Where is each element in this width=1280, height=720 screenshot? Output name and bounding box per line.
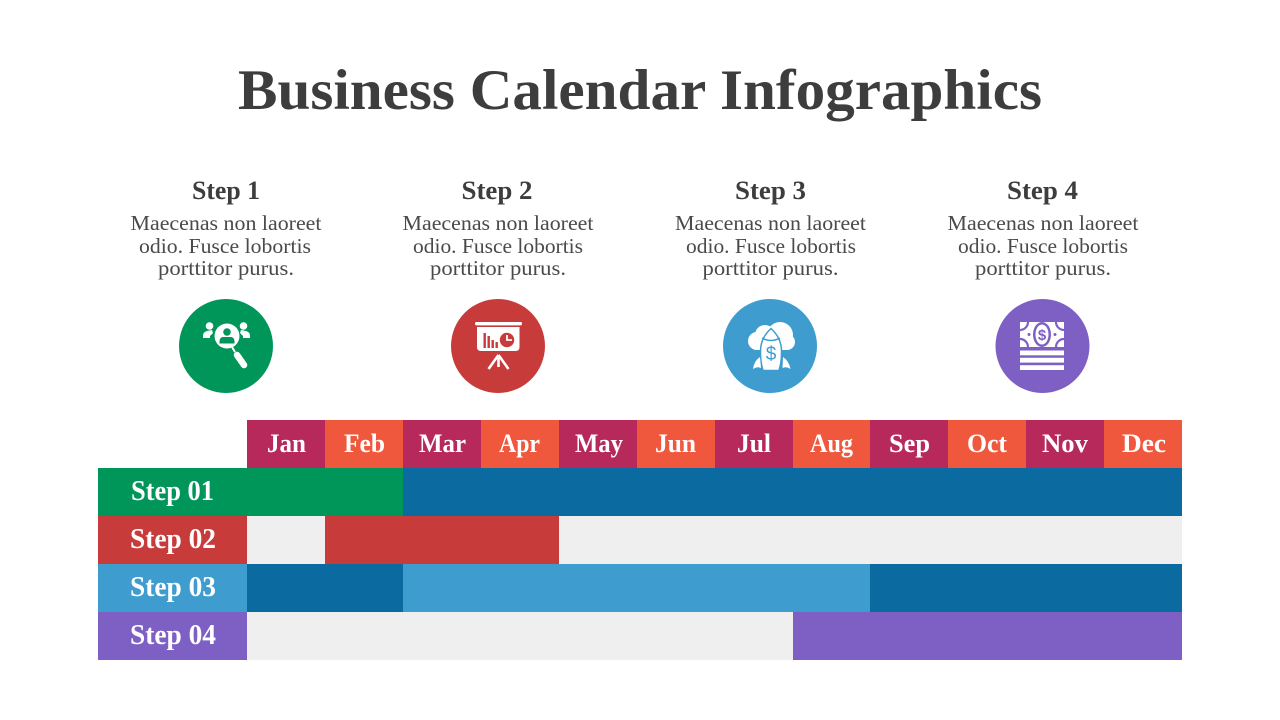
icon: banknotes [996,299,1090,393]
step 2 text: odio. Fusce lobortis [413,234,583,258]
icon: rocket and cloud [723,299,817,393]
month header row: Jul [737,429,771,458]
row: step 04: Step 04 [130,620,216,651]
month header row: Aug [810,429,853,458]
month header row: Mar [419,429,466,458]
month header row: Feb [344,429,385,458]
panel: step 2 [402,176,594,393]
step 1 text: odio. Fusce lobortis [139,234,311,258]
month header row: Oct [967,429,1007,458]
row: step 01: Step 01 [131,476,214,507]
row: step 03 [98,564,1182,612]
step 1 text [130,211,322,280]
icon: person search [179,299,273,393]
icon: banknotes: $ [1038,327,1047,344]
step 4 text: porttitor purus. [975,256,1111,280]
row: step 02 [98,516,1182,564]
panel: step 4 [948,176,1139,393]
step 1 text: porttitor purus. [158,256,294,280]
step 2 heading: Step 2 [462,176,532,205]
row: step 01 [98,468,1182,516]
step 4 text: odio. Fusce lobortis [958,234,1128,258]
step 4 heading: Step 4 [1007,176,1078,205]
step 4 text [948,211,1139,280]
step 2 text: porttitor purus. [430,256,566,280]
panel: step 1 [130,176,322,393]
row: step 02: Step 02 [130,524,216,555]
step 3 text: Maecenas non laoreet [675,211,866,235]
step 1 heading: Step 1 [192,176,260,205]
title: Business Calendar Infographics [238,59,1042,122]
icon: rocket and cloud: $ [766,344,777,365]
step 1 text: Maecenas non laoreet [130,211,322,235]
gantt chart [98,420,1182,660]
month header row: May [575,429,623,458]
step 3 heading: Step 3 [735,176,806,205]
icon: presentation board [451,299,545,393]
month header row: Apr [499,429,540,458]
month header row: Jun [655,429,697,458]
month header row: Sep [889,429,930,458]
step 4 text: Maecenas non laoreet [948,211,1139,235]
month header row: Nov [1042,429,1088,458]
row: step 04 [98,612,1182,660]
month header row [247,420,1182,468]
step 3 text: odio. Fusce lobortis [686,234,856,258]
month header row: Jan [267,429,307,458]
step 3 text: porttitor purus. [702,256,838,280]
step 2 text [402,211,594,280]
step 2 text: Maecenas non laoreet [402,211,594,235]
month header row: Dec [1122,429,1166,458]
row: step 03: Step 03 [130,572,216,603]
step 3 text [675,211,866,280]
panel: step 3 [675,176,866,393]
